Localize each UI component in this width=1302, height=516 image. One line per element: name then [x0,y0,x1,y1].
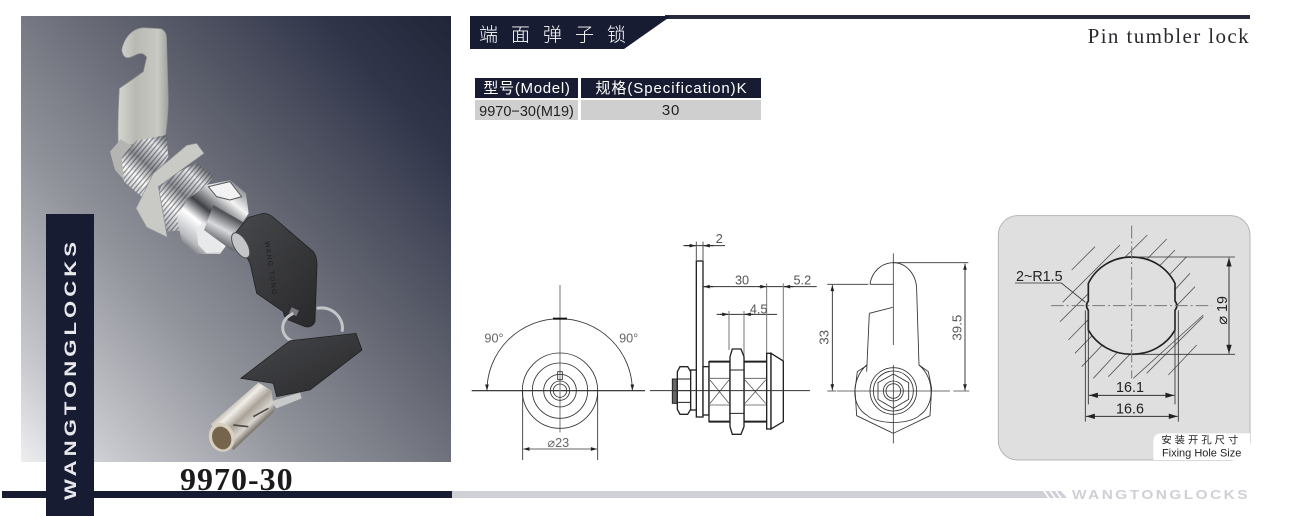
back nut [110,139,133,180]
dimension lines [1015,257,1235,422]
key one hole [289,307,299,316]
drawing: side view with dimensions: 5.2 [794,273,811,287]
lock cam [118,28,168,147]
product model number: 9970-30 [180,461,294,497]
dimension labels [1016,269,1231,418]
bottom watermark brand: WANGTONGLOCKS [1072,488,1250,502]
drawing: side view with dimensions: 2 [716,232,723,246]
drawing: front view with rotation angle [472,285,645,460]
drawing: front view with rotation angle: 90° [484,331,504,345]
dimension labels: ⌀ 19 [1215,296,1231,325]
drawing: front view with rotation angle: ⌀23 [547,436,569,450]
caption box [1153,433,1250,460]
centre lines [1051,226,1212,378]
table header: specification: 规格(Specification)K [595,80,748,97]
hex nut [136,143,204,237]
threaded barrel: rear section [122,135,168,199]
key one lettering: WANG TONG [263,241,277,295]
key two blade [270,393,302,408]
drawing: rear view with cam dimensions [817,253,969,443]
key one head [235,213,317,327]
drawing: side view with dimensions: 4.5 [750,303,767,317]
dimension labels: 2~R1.5 [1016,269,1063,285]
header english subtitle: Pin tumbler lock [1088,24,1250,48]
panel: fixing hole size [998,216,1250,460]
key two tube end [205,419,239,455]
key two tube notches [233,408,268,427]
key ring [283,308,342,342]
header tag title: 端面弹子锁 [479,24,639,46]
photo backdrop gradient [21,16,451,462]
key two tube [211,383,274,450]
table cell: spec value [581,100,761,120]
sidebar brand band [46,214,94,516]
bezel inner shadow [208,182,242,200]
drawing: side view with dimensions: 30 [735,273,749,287]
drawing: rear view with cam dimensions: 39.5 [950,315,965,341]
drawing: front view with rotation angle: 90° [619,331,638,345]
hole outline [1086,257,1177,354]
table cell: model value: 9970−30(M19) [479,104,574,120]
photo: cam lock with keys [110,28,362,455]
chrome bezel [177,180,249,254]
dimension labels: 16.1 [1116,380,1144,396]
header line [665,15,1250,19]
sidebar brand text: WANGTONGLOCKS [62,238,80,500]
caption box: Fixing Hole Size [1162,447,1241,459]
hatching [1060,235,1203,378]
specification table [475,78,761,120]
key two head [241,333,362,397]
panel: product photo [21,16,451,462]
caption box: 安装开孔尺寸 [1161,434,1241,447]
key pin stub [228,230,253,261]
bottom bar: dark section [2,491,452,498]
drawing: rear view with cam dimensions: 33 [817,330,832,345]
key pin [204,205,244,252]
header tag [470,16,671,49]
drawing: side view with dimensions [650,232,817,434]
dimension labels: 16.6 [1116,402,1144,418]
lock face [197,222,222,253]
table header: model: 型号(Model) [483,80,571,97]
panel background [998,216,1250,460]
threaded barrel: front section [157,163,214,232]
table cell: spec value: 30 [662,102,680,119]
bottom bar: light section with stripes [452,491,1067,498]
